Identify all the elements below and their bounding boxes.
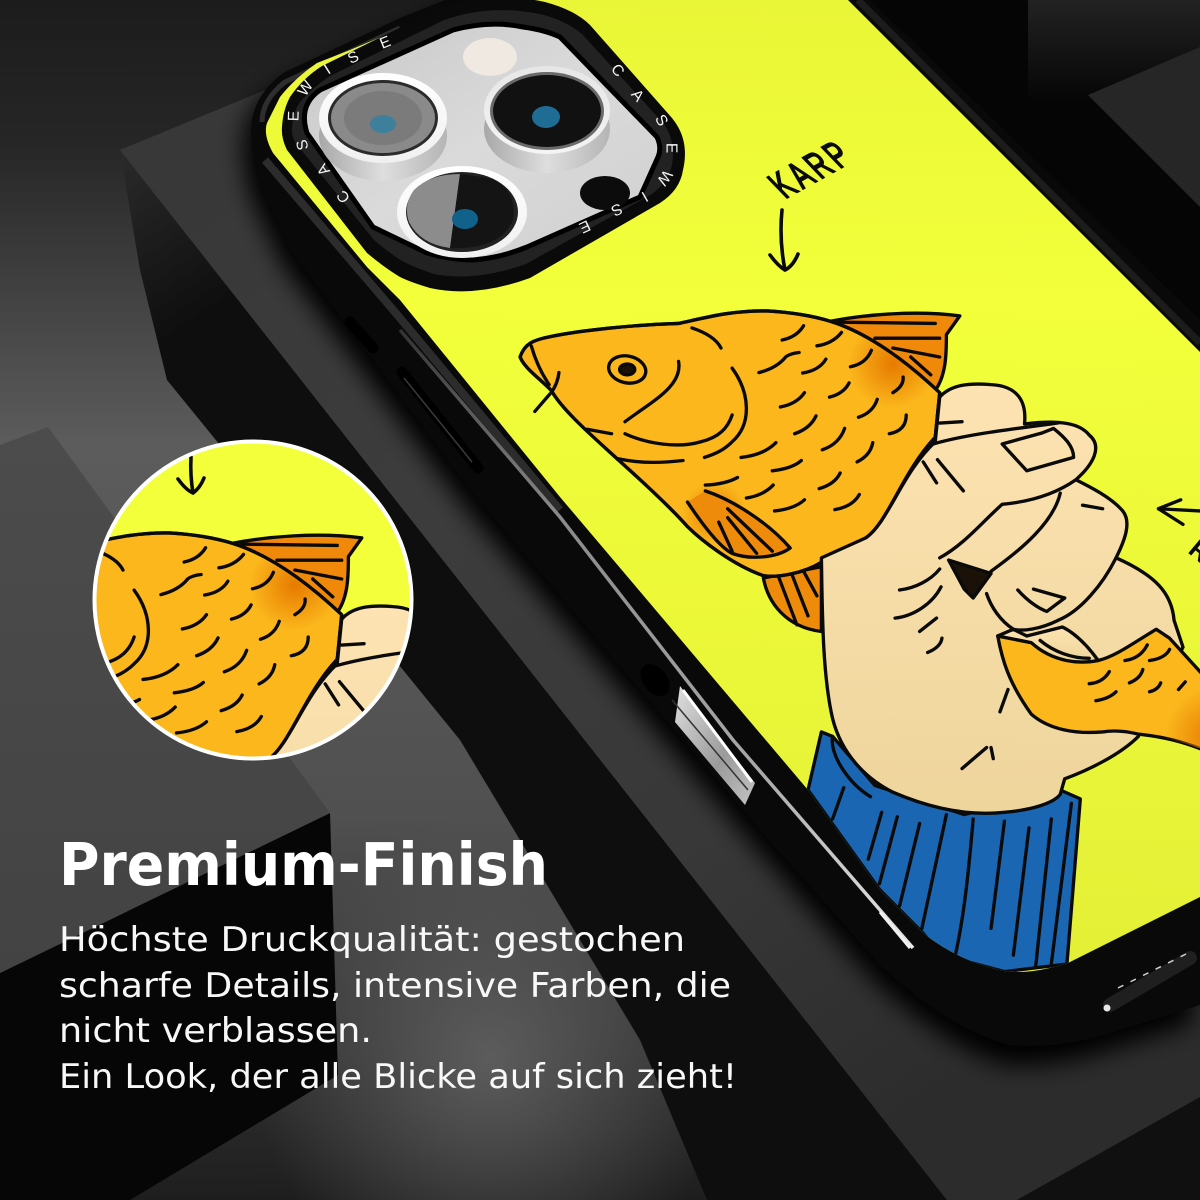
flash [463, 38, 517, 76]
body text: scharfe Details, intensive Farben, die [59, 966, 731, 1006]
body text: Ein Look, der alle Blicke auf sich zieht! [59, 1057, 737, 1097]
CASEWISE ring lettering: S [608, 199, 625, 219]
lens: top left [319, 73, 447, 181]
small block top surface [0, 427, 330, 973]
lens: top right [484, 66, 610, 173]
volume button [402, 372, 478, 468]
CASEWISE ring lettering: A [627, 86, 647, 106]
block side face [120, 150, 947, 1200]
hand-drawn arrow to the carp [770, 210, 798, 270]
upper right backdrop [850, 0, 1200, 360]
CASEWISE ring lettering: E [662, 143, 680, 153]
phone shadow [243, 4, 1192, 1065]
charging port [1104, 952, 1190, 1012]
CASEWISE ring lettering: A [314, 160, 334, 179]
illustration: carp held in a hand [520, 311, 1200, 972]
CASEWISE ring lettering [285, 33, 680, 236]
body text [59, 920, 737, 1097]
heading: Premium-Finish [59, 830, 548, 899]
CASEWISE ring lettering: W [653, 167, 675, 189]
small block front face [0, 813, 338, 1200]
CASEWISE ring lettering: W [295, 77, 317, 99]
CASEWISE ring lettering: S [345, 48, 362, 68]
mute switch [350, 322, 373, 348]
lens: bottom [397, 166, 527, 258]
CASEWISE ring lettering: I [321, 61, 334, 78]
hand lettering: KARP: KARP [760, 133, 864, 206]
phone case body [251, 0, 1200, 1046]
CASEWISE ring lettering: E [576, 216, 593, 236]
CASEWISE ring lettering: S [651, 112, 671, 129]
side button [672, 686, 755, 805]
CASEWISE ring lettering: S [293, 138, 313, 152]
detail zoom circle [92, 440, 414, 760]
body text: Höchste Druckqualität: gestochen [59, 920, 685, 960]
CASEWISE ring lettering: E [377, 33, 393, 53]
CASEWISE ring lettering: C [607, 61, 627, 80]
CASEWISE ring lettering: C [334, 187, 354, 206]
CASEWISE ring lettering: E [285, 111, 303, 122]
body text: nicht verblassen. [59, 1011, 372, 1051]
phone back print: yellow panel [266, 0, 1200, 972]
camera module [282, 0, 685, 291]
CASEWISE ring lettering: I [638, 188, 651, 205]
microphone hole [580, 176, 630, 210]
camera glass plate [304, 24, 660, 260]
